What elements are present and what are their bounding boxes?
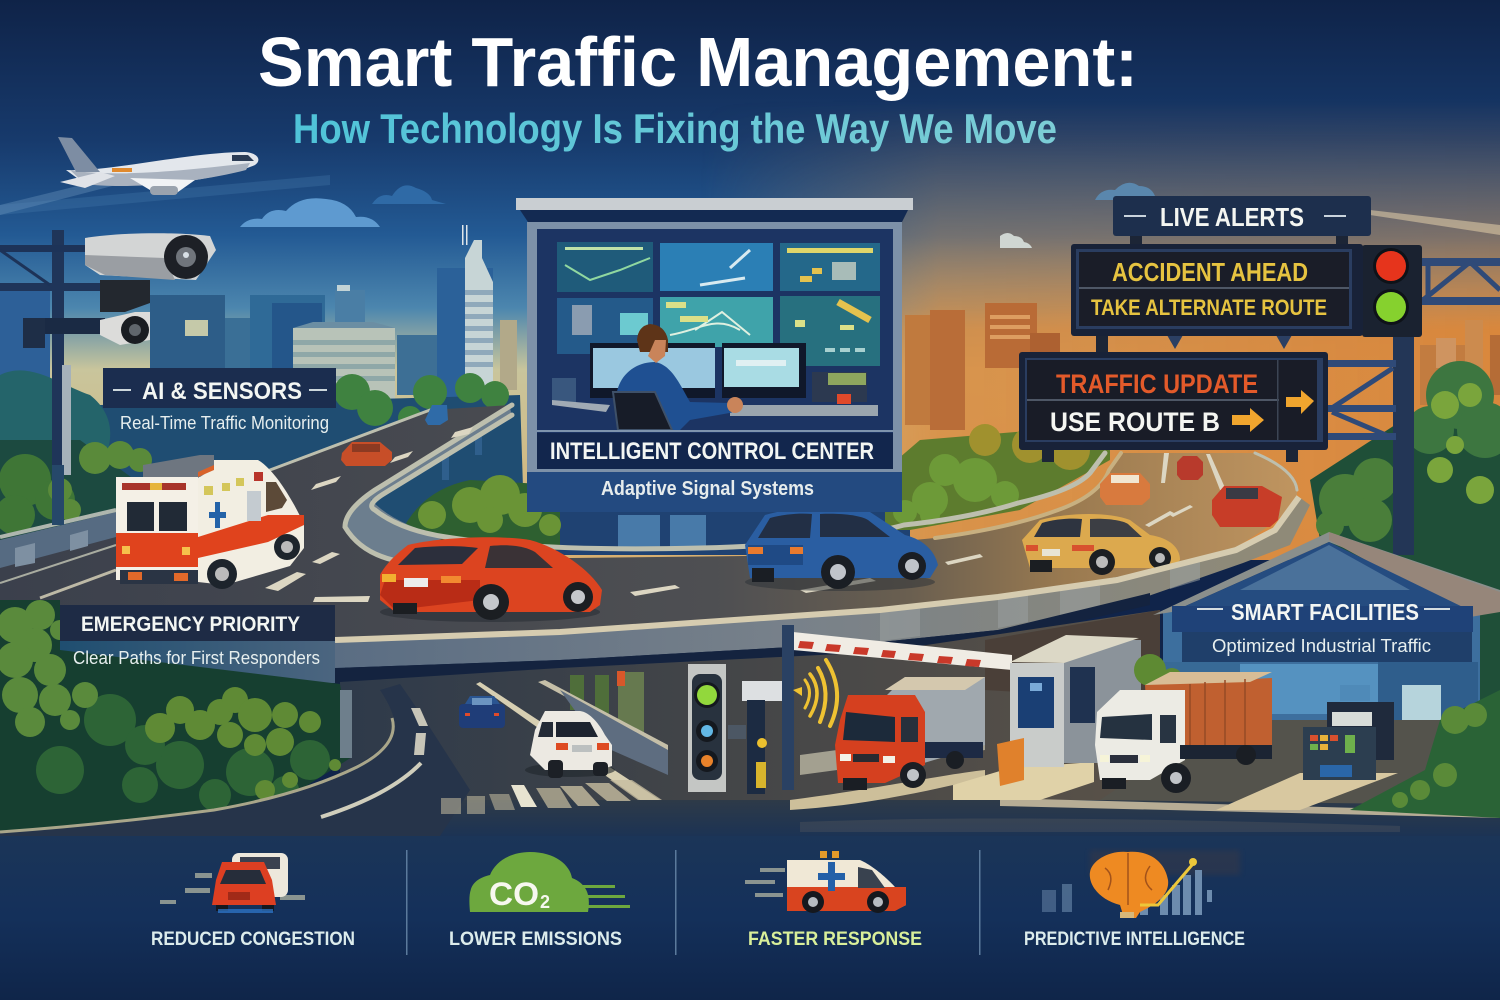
- camera: large: [85, 233, 216, 312]
- camera: small: [100, 312, 150, 345]
- arrow: route b: [1232, 408, 1264, 432]
- wall screens: [557, 242, 880, 366]
- icon: faster response ambulance: [745, 851, 906, 913]
- sign: traffic update: [1019, 352, 1328, 450]
- sign: accident ahead: ACCIDENT AHEAD: [1112, 257, 1308, 287]
- control center subtitle: Adaptive Signal Systems: [601, 478, 814, 500]
- sky background: [0, 0, 1500, 560]
- red car: [380, 537, 602, 622]
- facility forecourt: [1100, 720, 1480, 805]
- lower road level: [0, 610, 1500, 836]
- icon: co2 cloud: [469, 852, 630, 912]
- label: ai and sensors: Real-Time Traffic Monitoring: [120, 413, 329, 433]
- bottom benefits band: [0, 836, 1500, 1000]
- blue car: [745, 507, 938, 591]
- trees behind road: [0, 361, 1500, 700]
- left barrier: [0, 510, 116, 598]
- ambulance: [116, 455, 304, 589]
- control kiosk: [1216, 702, 1398, 810]
- label: emergency priority: [60, 605, 335, 668]
- distant traffic cars: [1100, 456, 1282, 527]
- benefit: faster response: FASTER RESPONSE: [748, 929, 922, 950]
- benefit: predictive intelligence: PREDICTIVE INTELLIGENCE: [1024, 929, 1245, 950]
- sign: traffic update: USE ROUTE B: [1050, 407, 1220, 437]
- overhead gantry: [1042, 234, 1500, 555]
- arrow: sign right: [1286, 390, 1314, 414]
- title: Smart Traffic Management:: [258, 23, 1138, 101]
- white suv: [525, 711, 615, 778]
- white truck: [1095, 672, 1272, 793]
- subtitle: How Technology Is Fixing the Way We Move: [293, 105, 1057, 152]
- label: ai and sensors: [103, 368, 336, 433]
- traffic light: overhead: [1362, 245, 1422, 337]
- upper highway: [0, 405, 1297, 640]
- airplane: [0, 137, 258, 215]
- icon: reduced congestion car: [160, 853, 305, 913]
- facility label: Optimized Industrial Traffic: [1212, 636, 1431, 656]
- workstation: [552, 343, 878, 416]
- lower road blue car: [459, 696, 505, 728]
- ramp wall: [345, 407, 512, 560]
- left skyline: [0, 225, 517, 440]
- control center: [516, 198, 913, 512]
- facility label: SMART FACILITIES: [1231, 599, 1419, 625]
- benefit: lower emissions: LOWER EMISSIONS: [449, 929, 622, 950]
- control center label: INTELLIGENT CONTROL CENTER: [550, 438, 874, 465]
- small vehicles on ramp: [341, 405, 448, 466]
- red truck: [835, 677, 985, 790]
- orange bollard: [997, 738, 1024, 786]
- deck wall: [60, 497, 1310, 684]
- trees behind trucks: [1134, 654, 1500, 818]
- wireless signal: [793, 660, 837, 726]
- signal tower: [688, 664, 726, 792]
- pillar: [782, 625, 794, 790]
- facility label: [1197, 599, 1450, 656]
- label: ai and sensors: AI & SENSORS: [142, 378, 302, 405]
- clouds: [240, 183, 1189, 248]
- toll booth: [953, 635, 1141, 800]
- sign: accident ahead: TAKE ALTERNATE ROUTE: [1091, 295, 1327, 320]
- icon: co2 cloud: 2: [540, 892, 550, 912]
- icon: predictive brain: [1042, 850, 1240, 918]
- control center label: [537, 433, 893, 469]
- benefit: reduced congestion: REDUCED CONGESTION: [151, 929, 355, 950]
- sign: live alerts: LIVE ALERTS: [1160, 202, 1304, 232]
- label: emergency priority: Clear Paths for First Responders: [73, 648, 320, 668]
- crosswalk: [441, 780, 662, 814]
- lower left curved road: [0, 684, 470, 836]
- camera pole: [0, 230, 105, 525]
- roadside sensor: [728, 681, 782, 794]
- icon: co2 cloud: CO: [489, 876, 539, 912]
- sign: traffic update: TRAFFIC UPDATE: [1056, 369, 1258, 399]
- operator: [613, 324, 743, 430]
- label: emergency priority: EMERGENCY PRIORITY: [81, 613, 300, 636]
- barrier gate: [793, 632, 1012, 670]
- dark backdrop behind upper left and ramp: [0, 385, 910, 555]
- sign: accident ahead: [1071, 244, 1363, 336]
- lower left trees: [0, 600, 352, 832]
- right skyline: [905, 303, 1500, 430]
- yellow car: [1022, 514, 1180, 575]
- smart facility building: [1153, 532, 1500, 800]
- sign: live alerts: [1113, 196, 1371, 236]
